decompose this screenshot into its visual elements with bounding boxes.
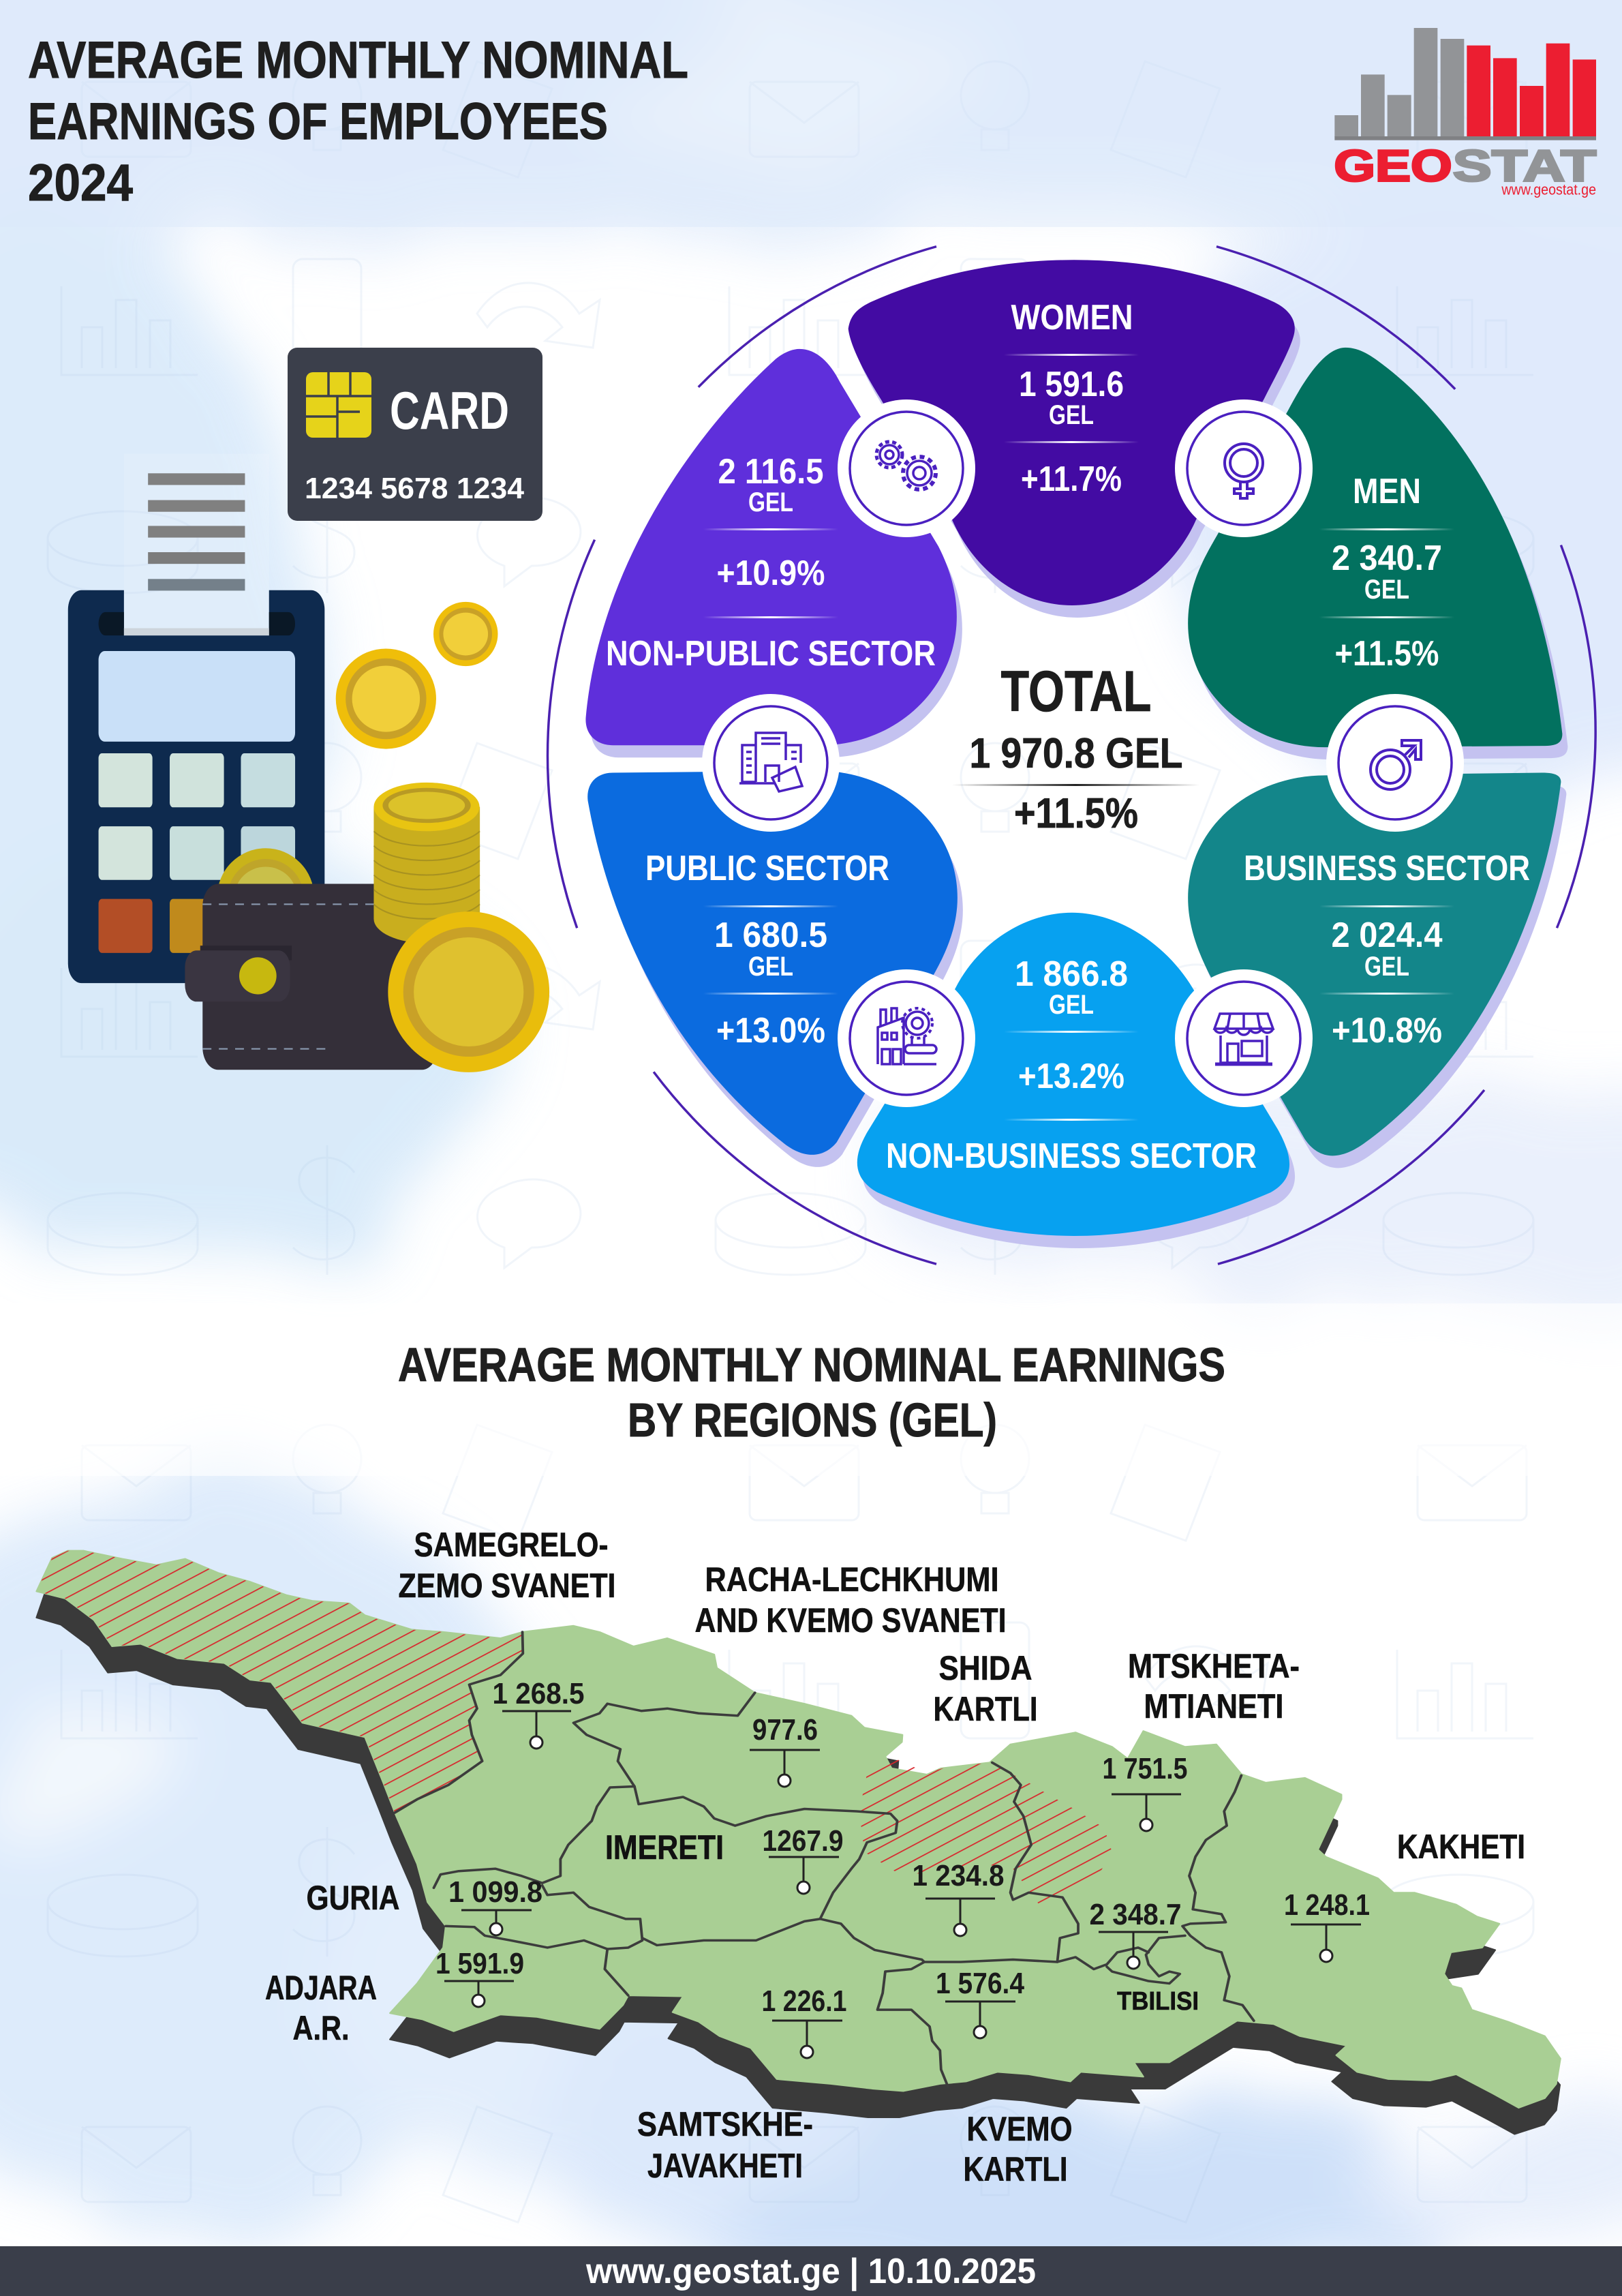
region labels: SAMTSKHE-: [637, 2105, 813, 2143]
petal: men: [1188, 348, 1562, 747]
title: 2024: [28, 154, 133, 212]
region labels: SAMEGRELO-: [414, 1526, 608, 1564]
map value: Imereti: 1267.9: [762, 1824, 844, 1858]
map value: Tbilisi: 2 348.7: [1089, 1898, 1182, 1931]
center total: 1 970.8 GEL: [969, 730, 1183, 777]
petal: public sector: GEL: [748, 952, 793, 982]
region labels: A.R.: [293, 2009, 349, 2047]
outer ring arcs: [548, 247, 1595, 1264]
petal: non-business sector: 1 866.8: [1015, 954, 1128, 994]
map value: Racha-Lechkhumi and Kvemo Svaneti: 977.6: [752, 1713, 818, 1747]
section heading: regions: [398, 1338, 1225, 1447]
region labels: KARTLI: [934, 1690, 1037, 1728]
map value: Kakheti: [1284, 1888, 1370, 1962]
logo: Geostat: GEO: [1334, 141, 1452, 191]
map value: Guria: 1 099.8: [448, 1875, 542, 1909]
illustration: payment terminal, wallet and coins: [68, 454, 549, 1072]
petal: business sector: BUSINESS SECTOR: [1244, 849, 1530, 888]
petal: business sector: +10.8%: [1332, 1011, 1442, 1051]
region labels: KARTLI: [964, 2150, 1067, 2188]
petal: non-business sector: [857, 913, 1289, 1236]
petal: men: +11.5%: [1334, 634, 1439, 674]
petal: non-business sector: GEL: [1049, 990, 1094, 1020]
petal: non-public sector: [585, 349, 957, 745]
map value: Kakheti: 1 248.1: [1284, 1888, 1370, 1922]
icon: female symbol: [1175, 399, 1313, 537]
region labels: KAKHETI: [1397, 1828, 1525, 1866]
section heading: regions: AVERAGE MONTHLY NOMINAL EARNINGS: [398, 1338, 1225, 1391]
credit card: [288, 348, 542, 521]
credit card: 1234 5678 1234: [305, 472, 525, 505]
map value: Kvemo Kartli: 1 576.4: [936, 1967, 1024, 2000]
petal: women: WOMEN: [1011, 298, 1133, 337]
center total: +11.5%: [1014, 790, 1138, 837]
map value: Racha-Lechkhumi and Kvemo Svaneti: [750, 1713, 820, 1787]
icon: gears: [838, 399, 975, 537]
region labels: SHIDA: [939, 1649, 1032, 1687]
credit card: CARD: [390, 380, 509, 440]
footer: www.geostat.ge | 10.10.2025: [585, 2252, 1036, 2291]
petal: public sector: [587, 771, 958, 1155]
map value: Samtskhe-Javakheti: [762, 1984, 846, 2058]
region labels: KVEMO: [966, 2110, 1073, 2148]
map value: Imereti: [762, 1824, 844, 1894]
icon: factory: [838, 969, 975, 1107]
map value: Adjara: 1 591.9: [435, 1947, 524, 1980]
region labels: MTSKHETA-: [1128, 1647, 1300, 1685]
icon: shop: [1175, 969, 1313, 1107]
region labels: AND KVEMO SVANETI: [695, 1601, 1006, 1640]
region labels: MTIANETI: [1144, 1687, 1284, 1725]
petal: non-business sector: NON-BUSINESS SECTOR: [886, 1136, 1257, 1176]
map value: Samtskhe-Javakheti: 1 226.1: [762, 1984, 846, 2018]
center total: TOTAL: [1000, 659, 1152, 723]
footer: [0, 2246, 1622, 2296]
petal: women: GEL: [1049, 400, 1094, 430]
petal: women: [848, 260, 1295, 605]
petal: non-public sector: 2 116.5: [718, 452, 823, 492]
petal: non-public sector: NON-PUBLIC SECTOR: [606, 634, 936, 674]
region labels: JAVAKHETI: [647, 2147, 803, 2185]
logo: Geostat: www.geostat.ge: [1501, 181, 1596, 198]
map of Georgia: [37, 1551, 1561, 2134]
petal: men: GEL: [1364, 575, 1409, 605]
petal: women: +11.7%: [1021, 459, 1122, 499]
petal: public sector: +13.0%: [716, 1011, 825, 1051]
map value: Mtskheta-Mtianeti: [1103, 1752, 1187, 1831]
title: AVERAGE MONTHLY NOMINAL: [28, 31, 688, 89]
petal: non-public sector: GEL: [748, 487, 793, 517]
region labels: TBILISI: [1117, 1987, 1199, 2016]
region labels: IMERETI: [605, 1828, 724, 1867]
map value: Shida Kartli: [912, 1859, 1005, 1936]
petal shadows: [591, 272, 1567, 1248]
petal: public sector: PUBLIC SECTOR: [645, 849, 889, 888]
petal: men: 2 340.7: [1332, 539, 1442, 578]
map value: Samegrelo-Zemo Svaneti: [492, 1677, 585, 1749]
petal: business sector: GEL: [1364, 952, 1409, 982]
region labels: ADJARA: [265, 1969, 377, 2007]
logo: Geostat: STAT: [1453, 141, 1596, 191]
petal: men: MEN: [1353, 472, 1421, 511]
map value: Samegrelo-Zemo Svaneti: 1 268.5: [492, 1677, 585, 1710]
petal: women: 1 591.6: [1019, 365, 1124, 404]
petal: business sector: [1188, 772, 1561, 1155]
petal: non-public sector: +10.9%: [717, 554, 825, 593]
region labels: GURIA: [307, 1879, 399, 1917]
map value: Mtskheta-Mtianeti: 1 751.5: [1103, 1752, 1187, 1785]
map value: Adjara: [435, 1947, 524, 2007]
center total: [952, 659, 1199, 837]
icon: office buildings: [702, 694, 840, 832]
map value: Tbilisi: [1089, 1898, 1182, 1969]
petal: non-business sector: +13.2%: [1018, 1057, 1124, 1096]
region labels: [265, 1526, 1525, 2188]
region labels: ZEMO SVANETI: [398, 1567, 616, 1605]
map value: Guria: [448, 1875, 542, 1935]
map value: Shida Kartli: 1 234.8: [912, 1859, 1005, 1892]
title: [28, 31, 688, 212]
section heading: regions: BY REGIONS (GEL): [628, 1393, 997, 1447]
petal: public sector: 1 680.5: [714, 916, 827, 955]
logo: Geostat: [1334, 28, 1596, 198]
petal: business sector: 2 024.4: [1332, 916, 1443, 955]
region labels: RACHA-LECHKHUMI: [705, 1560, 999, 1599]
icon: male symbol: [1326, 694, 1464, 832]
title: EARNINGS OF EMPLOYEES: [28, 93, 608, 151]
map value: Kvemo Kartli: [936, 1967, 1024, 2038]
